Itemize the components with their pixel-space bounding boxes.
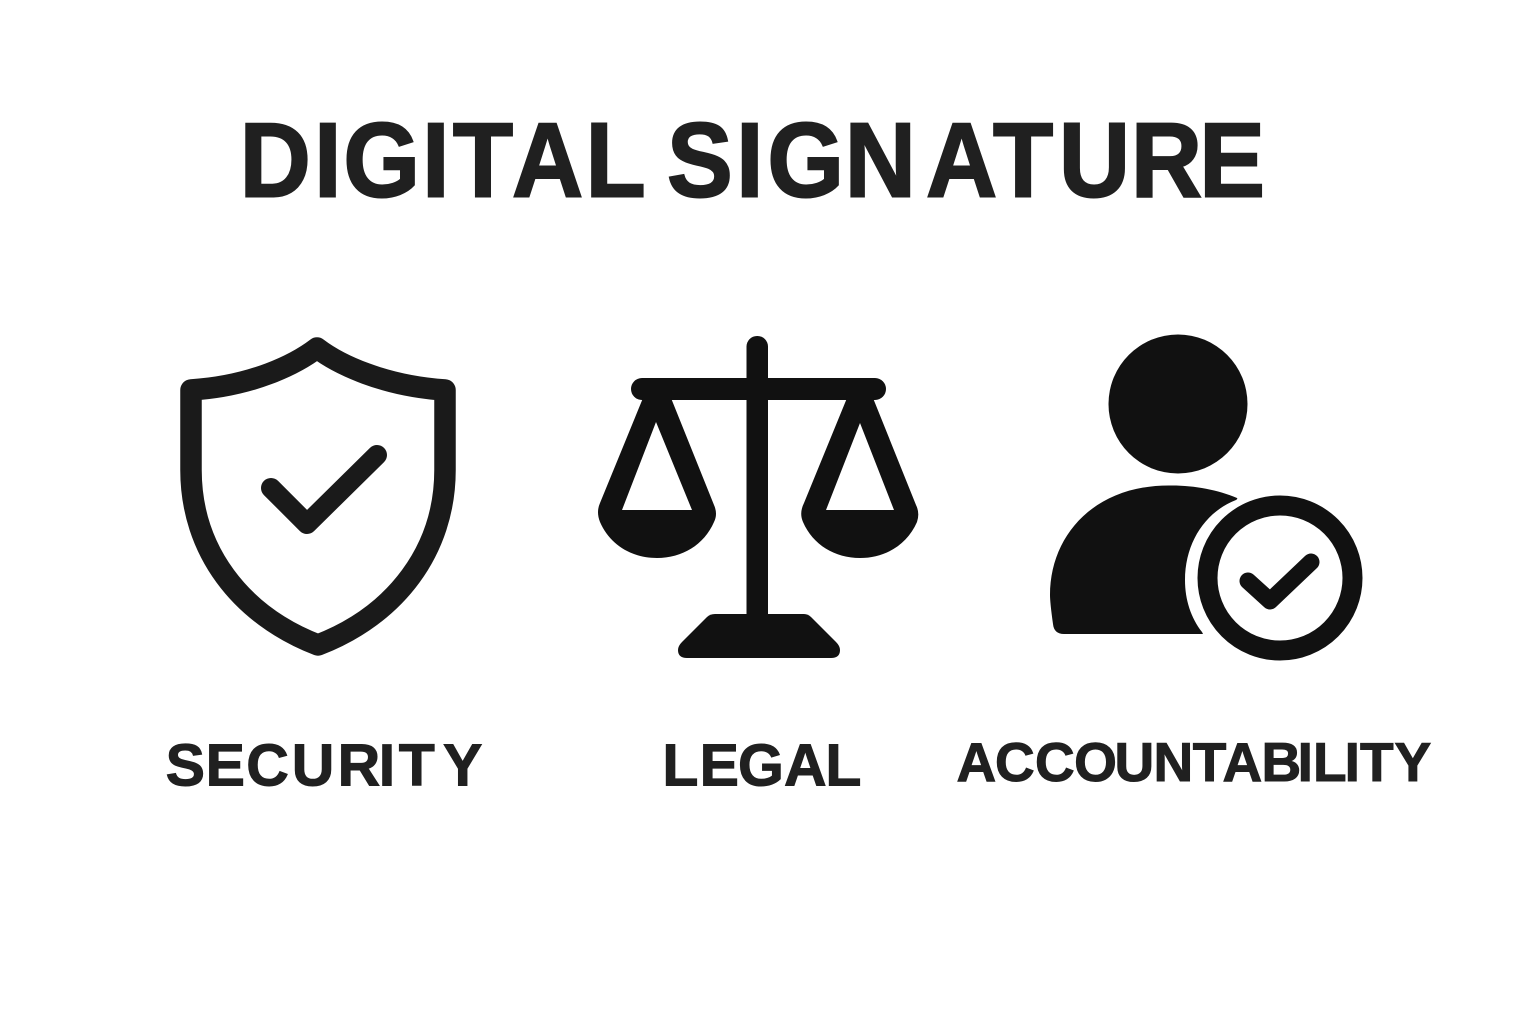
label: security: SECURITY (166, 732, 482, 798)
icon: person with check badge (1050, 334, 1352, 650)
icon: shield with check (191, 348, 445, 645)
label: legal: LEGAL (662, 732, 861, 798)
icon: balance scales (598, 336, 918, 658)
label: accountability: ACCOUNTABILITY (956, 731, 1431, 793)
title: DIGITAL SIGNATURE (240, 100, 1265, 219)
